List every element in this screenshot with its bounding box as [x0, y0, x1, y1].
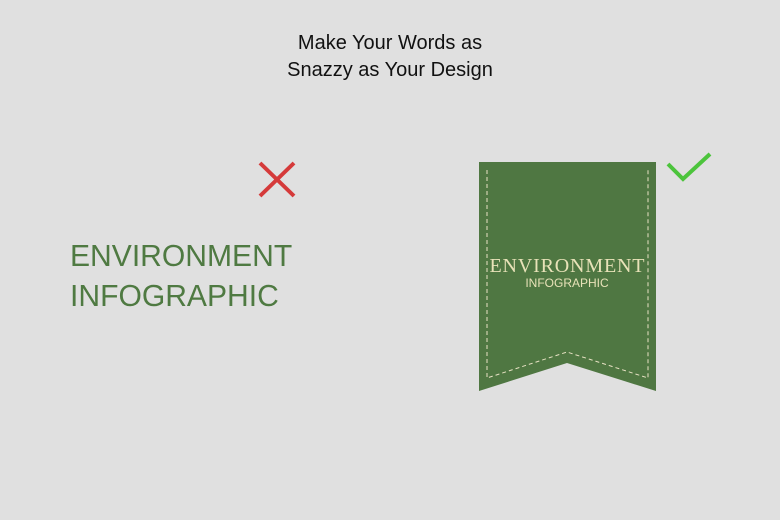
title — [287, 32, 493, 81]
plain text example — [70, 238, 292, 313]
plain text example: ENVIRONMENT — [70, 238, 292, 273]
banner shape — [479, 162, 656, 391]
banner shape: INFOGRAPHIC — [525, 276, 609, 290]
banner shape: ENVIRONMENT — [490, 255, 644, 277]
title: Snazzy as Your Design — [287, 59, 493, 81]
title: Make Your Words as — [298, 32, 482, 54]
plain text example: INFOGRAPHIC — [70, 278, 279, 313]
